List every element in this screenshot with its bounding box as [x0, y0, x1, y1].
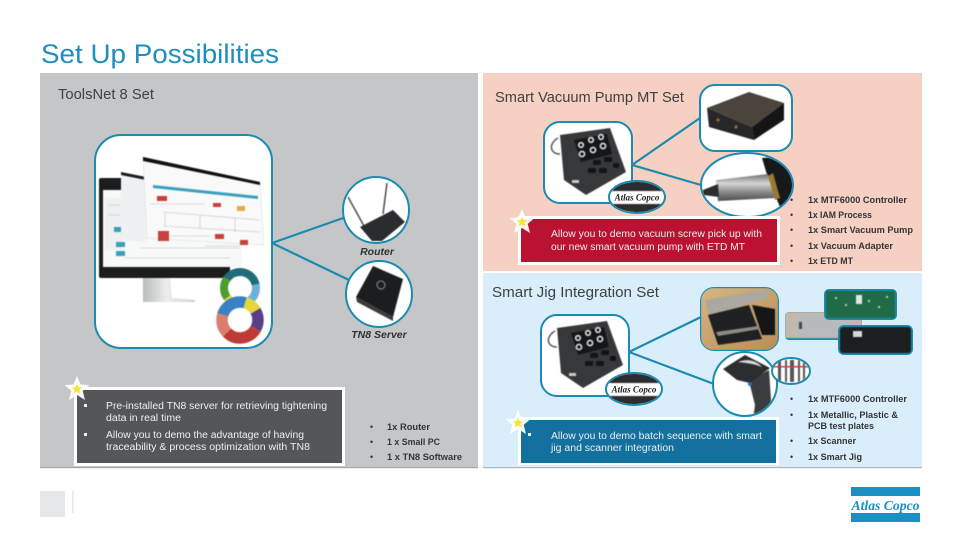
callout: vacuum demo: Allow you to demo vacuum screw pick up with [551, 229, 762, 240]
card: monitor with TN8 software [95, 135, 272, 348]
callout: jig demo [518, 417, 779, 465]
callout: vacuum demo: our new smart vacuum pump with ETD MT [551, 242, 745, 253]
badge: Atlas Copco logo [609, 181, 665, 214]
title: Set Up Possibilities [41, 39, 279, 69]
list: vacuum set contents: • [790, 241, 793, 251]
list: vacuum set contents: 1x MTF6000 Controller [808, 195, 907, 206]
connector lines to pump and adapter [632, 118, 701, 185]
card: vacuum pump [700, 85, 792, 151]
callout: TN8 benefits: Pre-installed TN8 server for retrieving tightening [106, 401, 327, 412]
panel: ToolsNet 8 set [40, 73, 478, 468]
list: jig set contents: • [790, 436, 793, 446]
connector lines to router and server [272, 217, 351, 281]
list: jig set contents: • [790, 452, 793, 462]
callout: jig demo: jig and scanner integration [550, 443, 674, 454]
list: jig set contents: 1x Metallic, Plastic & [808, 410, 898, 421]
callout: TN8 benefits [74, 387, 345, 466]
heading: ToolsNet 8 Set: ToolsNet 8 Set [58, 86, 155, 103]
list: vacuum set contents: • [790, 225, 793, 235]
label: Router: Router [360, 246, 395, 258]
list: TN8 set contents: 1 x TN8 Software [387, 452, 462, 463]
callout: TN8 benefits: data in real time [106, 413, 181, 424]
list: TN8 set contents: 1 x Small PC [387, 437, 440, 448]
list: TN8 set contents: • [370, 437, 373, 447]
list: vacuum set contents: 1x Vacuum Adapter [808, 241, 893, 252]
heading: Smart Vacuum Pump MT Set: Smart Vacuum Pump MT Set [495, 89, 685, 106]
list: TN8 set contents: • [370, 422, 373, 432]
heading: Smart Jig Integration Set: Smart Jig Integration Set [492, 284, 660, 301]
icon: barcode [772, 358, 810, 384]
callout: TN8 benefits: Allow you to demo the advantage of having [106, 430, 304, 441]
list: jig set contents [790, 394, 907, 463]
list: vacuum set contents: 1x Smart Vacuum Pump [808, 225, 913, 236]
panel: Smart Jig Integration set [483, 273, 922, 468]
logo: Atlas Copco [851, 487, 920, 522]
footer page marker [40, 491, 74, 517]
icon: scanner [713, 352, 777, 420]
list: jig set contents: 1x Smart Jig [808, 452, 862, 463]
icon: star [510, 209, 534, 233]
connector lines to jig and scanner [629, 317, 714, 384]
list: jig set contents: • [790, 410, 793, 420]
list: vacuum set contents: 1x IAM Process [808, 210, 872, 221]
photo: PCB test plate [824, 289, 897, 320]
card: MTF6000 controller [544, 122, 632, 203]
callout: TN8 benefits: traceability & process optimization with TN8 [106, 442, 310, 453]
list: vacuum set contents: 1x ETD MT [808, 256, 853, 267]
list: vacuum set contents: • [790, 256, 793, 266]
list: TN8 set contents [370, 422, 462, 463]
badge: Atlas Copco logo [606, 373, 662, 406]
list: jig set contents: • [790, 394, 793, 404]
list: jig set contents: PCB test plates [808, 421, 874, 432]
icon: star [506, 410, 530, 434]
photo: metallic test plate [785, 312, 862, 340]
callout: jig demo: Allow you to demo batch sequence with smart [551, 431, 762, 442]
photo: plastic test plate [838, 325, 913, 355]
list: jig set contents: 1x Scanner [808, 436, 856, 447]
label: TN8 Server: TN8 Server [351, 329, 408, 341]
card: MTF6000 controller [541, 315, 629, 396]
icon: star [64, 376, 90, 400]
list: vacuum set contents: • [790, 195, 793, 205]
icon: router [343, 177, 409, 243]
list: TN8 set contents: • [370, 452, 373, 462]
icon: vacuum adapter [701, 153, 800, 217]
logo: Atlas Copco: Atlas Copco [851, 499, 920, 514]
card: smart jig [701, 288, 778, 350]
icon: TN8 server [346, 261, 412, 327]
list: TN8 set contents: 1x Router [387, 422, 430, 433]
list: jig set contents: 1x MTF6000 Controller [808, 394, 907, 405]
panel: Smart Vacuum Pump MT set [483, 73, 922, 271]
list: vacuum set contents [790, 195, 913, 267]
list: vacuum set contents: • [790, 210, 793, 220]
callout: vacuum demo [518, 216, 780, 265]
